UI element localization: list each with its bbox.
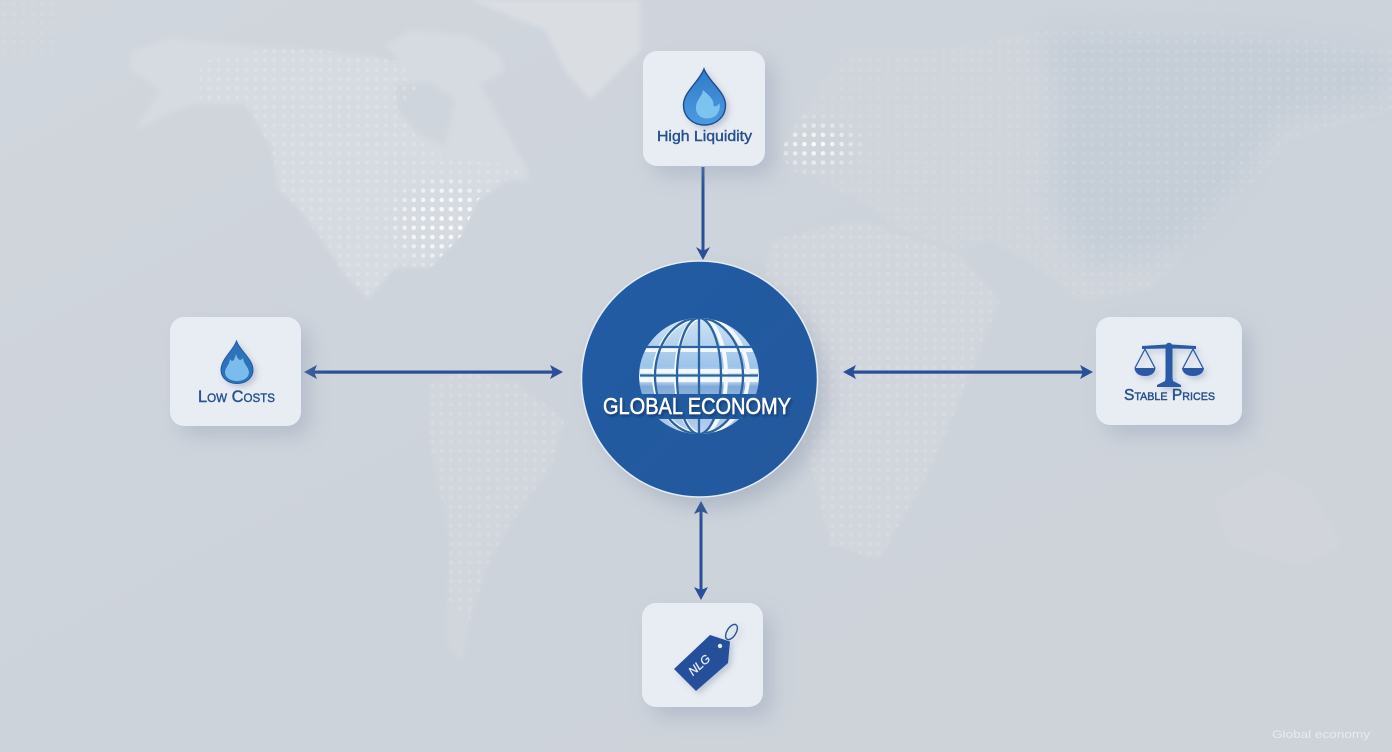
label: stable prices: Stable Prices [1124,387,1215,404]
arrow: low costs to global economy [304,365,563,379]
world map backdrop [200,2,1370,619]
card: low costs [170,317,310,436]
icon: balance scale [1134,343,1204,387]
icon: price tag: NLG [685,652,713,678]
decorative land masses [130,30,530,300]
icon: globe [639,318,759,434]
label: low costs: Low Costs [198,387,275,406]
card: high liquidity [643,51,774,176]
card: price tag [642,603,772,717]
arrow: high liquidity to global economy [696,167,710,260]
icon: water drop [684,69,726,125]
icon: flame drop [221,341,253,384]
card: stable prices [1096,317,1251,435]
central node: global economy [582,261,826,508]
dot matrix [276,86,1138,496]
arrow: tag to global economy [694,501,708,600]
label: high liquidity: High Liquidity [657,128,753,145]
title: global economy: GLOBAL ECONOMY [603,393,791,419]
arrow: stable prices to global economy [843,365,1093,379]
footer watermark: Global economy [1272,729,1371,741]
